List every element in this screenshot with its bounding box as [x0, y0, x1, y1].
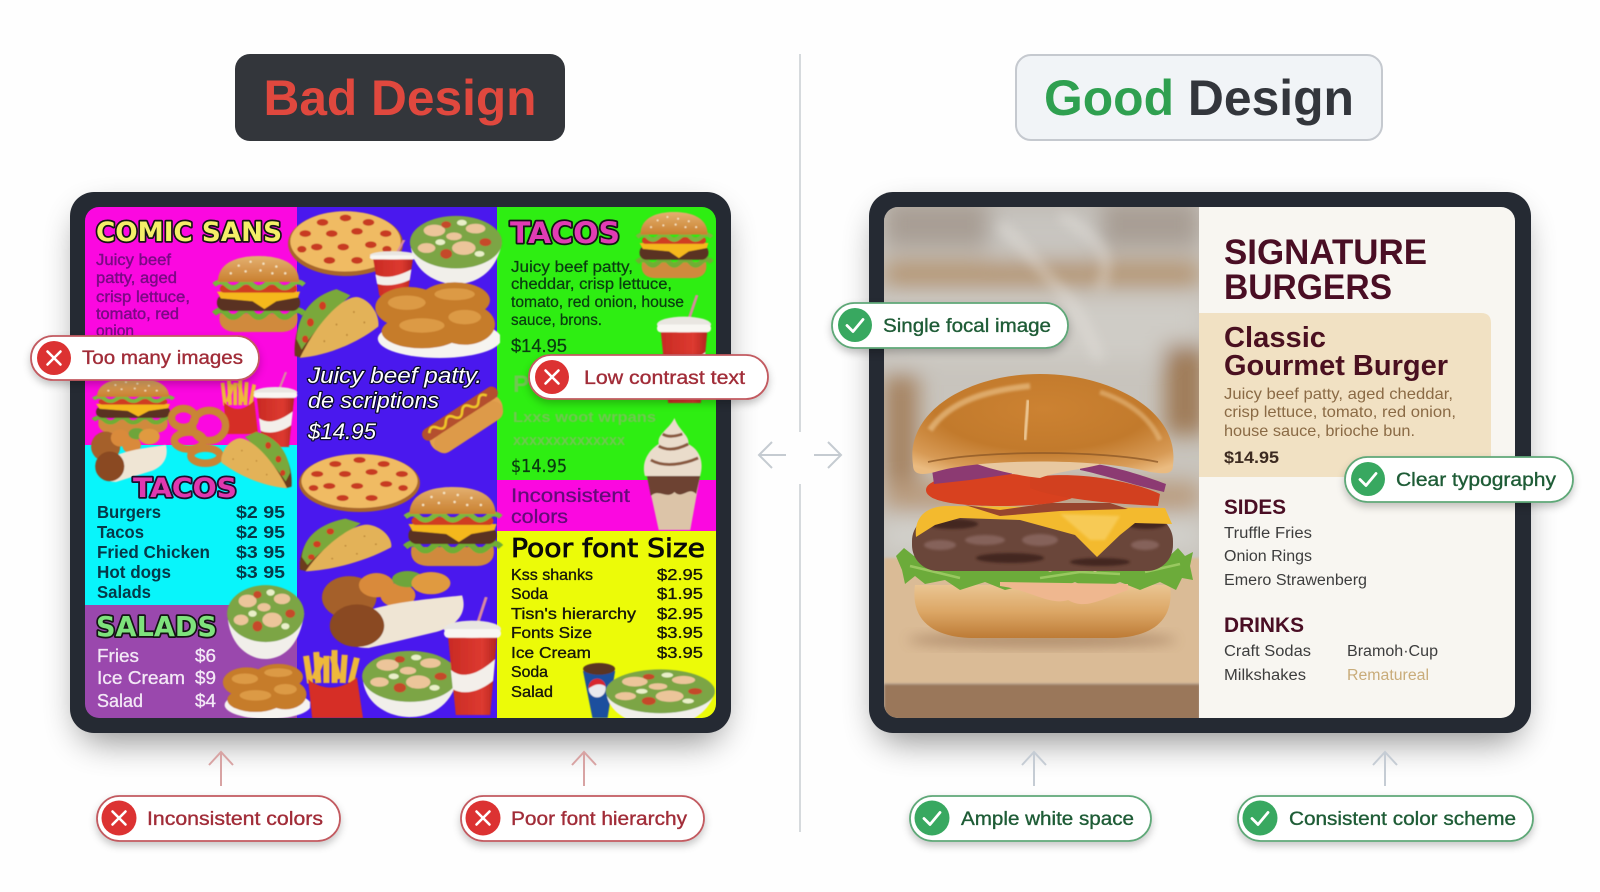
heading: tacos cyan: TACOS [133, 473, 237, 504]
panel: good design tablet [869, 192, 1531, 742]
price list: cyan: $2 95 [236, 522, 285, 542]
heading: tacos green: TACOS [510, 216, 620, 250]
drinks section: Bramoh·Cup [1347, 643, 1438, 660]
price list: yellow: Kss shanks [511, 567, 593, 584]
price list: yellow: $3.95 [657, 625, 703, 642]
text block: inconsistent colors [512, 488, 630, 524]
price list: cyan [97, 502, 285, 602]
arrow: up inconsistent colors [209, 752, 233, 786]
callout: clear typography [1345, 457, 1573, 502]
featured item panel: crisp lettuce, tomato, red onion, [1224, 404, 1456, 421]
text block: green description: sauce, brons. [511, 312, 602, 329]
price list: cyan: $3 95 [236, 562, 285, 582]
title: bad design [235, 54, 565, 141]
title: good design: Good Design [1044, 70, 1354, 126]
text block: magenta description: tomato, red [96, 306, 179, 323]
callout: poor font hierarchy: Poor font hierarchy [511, 809, 688, 830]
burger patty [912, 515, 1173, 571]
text block: low contrast text: Lxxs woot wrpans [513, 409, 656, 426]
sides section [1224, 496, 1367, 589]
price list: purple: $6 [195, 646, 216, 666]
price list: cyan: Hot dogs [97, 562, 171, 582]
text block: center italic: de scriptions [308, 388, 439, 413]
sides section: Truffle Fries [1224, 525, 1312, 542]
callout: consistent color scheme: Consistent color scheme [1289, 809, 1516, 830]
menu column [1199, 207, 1515, 718]
text block: center italic: Juicy beef patty. [307, 363, 482, 388]
callout: low contrast text: Low contrast text [584, 368, 746, 389]
text block: green description: $14.95 [511, 336, 567, 356]
drinks section: Rematureal [1347, 667, 1429, 684]
price list: yellow: Soda [511, 664, 548, 681]
price list: yellow: $2.95 [657, 606, 703, 623]
price list: yellow [511, 567, 703, 701]
callout: single focal image: Single focal image [883, 316, 1051, 337]
price list: cyan: Tacos [97, 522, 144, 542]
price list: purple: Ice Cream [97, 668, 185, 688]
callout: ample white space [910, 796, 1151, 841]
price list: yellow: Soda [511, 586, 548, 603]
featured item panel: Classic [1224, 322, 1326, 354]
bad menu screen [85, 207, 716, 726]
callout: inconsistent colors [97, 796, 340, 841]
text block: magenta description: Juicy beef [96, 252, 172, 269]
price list: cyan: $2 95 [236, 502, 285, 522]
callout: consistent color scheme [1238, 796, 1533, 841]
title: bad design: Bad Design [264, 70, 536, 126]
good menu screen [884, 200, 1515, 720]
text block: low contrast text: P [513, 371, 529, 398]
callout: too many images [31, 336, 259, 380]
price list: yellow: Salad [511, 684, 553, 701]
burger top bun [912, 374, 1173, 474]
drinks section: DRINKS [1224, 614, 1304, 637]
text block: center italic [307, 363, 482, 444]
text block: green description: tomato, red onion, house [511, 294, 684, 311]
sides section: Onion Rings [1224, 548, 1312, 565]
price list: cyan: Salads [97, 582, 151, 602]
arrow: center left [759, 442, 786, 468]
callout: too many images: Too many images [82, 348, 243, 369]
burger onion [932, 464, 1012, 484]
sides section: Emero Strawenberg [1224, 572, 1367, 589]
featured item panel [1199, 313, 1491, 477]
burger tomato [926, 474, 1080, 506]
price list: cyan: Fried Chicken [97, 542, 210, 562]
price list: purple: $9 [195, 668, 216, 688]
text block: magenta description: onion [96, 323, 134, 340]
text block: magenta description [96, 252, 190, 340]
text block: low contrast text [513, 371, 656, 449]
price list: yellow: $3.95 [657, 645, 703, 662]
featured item panel: Gourmet Burger [1224, 350, 1448, 382]
price list: yellow: $1.95 [657, 586, 703, 603]
arrow: up poor font hierarchy [572, 752, 596, 786]
heading: comic sans: COMIC SANS [96, 217, 282, 248]
callout: low contrast text [529, 355, 768, 399]
text block: magenta description: patty, aged [96, 270, 177, 287]
price list: cyan: Burgers [97, 502, 161, 522]
callout: single focal image [832, 303, 1068, 348]
burger bottom bun [914, 585, 1171, 638]
food images collage [91, 211, 715, 726]
text block: green description: cheddar, crisp lettuce, [511, 276, 672, 293]
callout: clear typography: Clear typography [1396, 470, 1557, 491]
price: green second: $14.95 [511, 456, 567, 477]
drinks section [1224, 618, 1438, 680]
price list: purple: $4 [195, 691, 216, 711]
price list: yellow: $2.95 [657, 567, 703, 584]
panel: bad design tablet [70, 192, 731, 742]
price list: purple: Salad [97, 691, 143, 711]
heading: salads: SALADS [96, 610, 217, 643]
drinks section: Craft Sodas [1224, 643, 1311, 660]
featured item panel: $14.95 [1224, 448, 1279, 467]
price list: yellow: Ice Cream [511, 645, 591, 662]
text block: center italic: $14.95 [307, 419, 377, 444]
text block: inconsistent colors: colors [511, 507, 568, 528]
burger sauce [1000, 582, 1128, 604]
text block: low contrast text: xxxxxxxxxxxxxx [513, 432, 626, 449]
arrow: up ample white space [1022, 752, 1046, 786]
text block: magenta description: crisp lettuce, [96, 289, 190, 306]
text block: green description [511, 259, 684, 356]
image: burger photo [884, 200, 1205, 720]
heading: poor font size: Poor font Size [511, 534, 705, 564]
price list: cyan: $3 95 [236, 542, 285, 562]
arrow: up consistent color scheme [1373, 752, 1397, 786]
price list: yellow: Tisn's hierarchy [511, 606, 636, 623]
sides section: SIDES [1224, 496, 1286, 519]
center divider [799, 54, 801, 832]
drinks section: Milkshakes [1224, 667, 1306, 684]
arrow: center right [814, 442, 841, 468]
burger cheese [916, 506, 1172, 557]
menu heading [1225, 239, 1426, 300]
callout: poor font hierarchy [461, 796, 704, 841]
callout: ample white space: Ample white space [961, 809, 1134, 830]
menu heading: BURGERS [1224, 268, 1392, 307]
price list: purple [97, 646, 216, 711]
featured item panel: Juicy beef patty, aged cheddar, [1224, 386, 1453, 403]
featured item panel: house sauce, brioche bun. [1224, 423, 1415, 440]
menu heading: SIGNATURE [1224, 233, 1427, 272]
title: good design [1016, 55, 1382, 140]
price list: purple: Fries [97, 646, 139, 666]
text block: inconsistent colors: Inconsistent [511, 486, 631, 507]
price list: yellow: Fonts Size [511, 625, 592, 642]
burger lettuce [896, 548, 1193, 592]
text block: green description: Juicy beef patty, [511, 259, 633, 276]
callout: inconsistent colors: Inconsistent colors [147, 809, 323, 830]
